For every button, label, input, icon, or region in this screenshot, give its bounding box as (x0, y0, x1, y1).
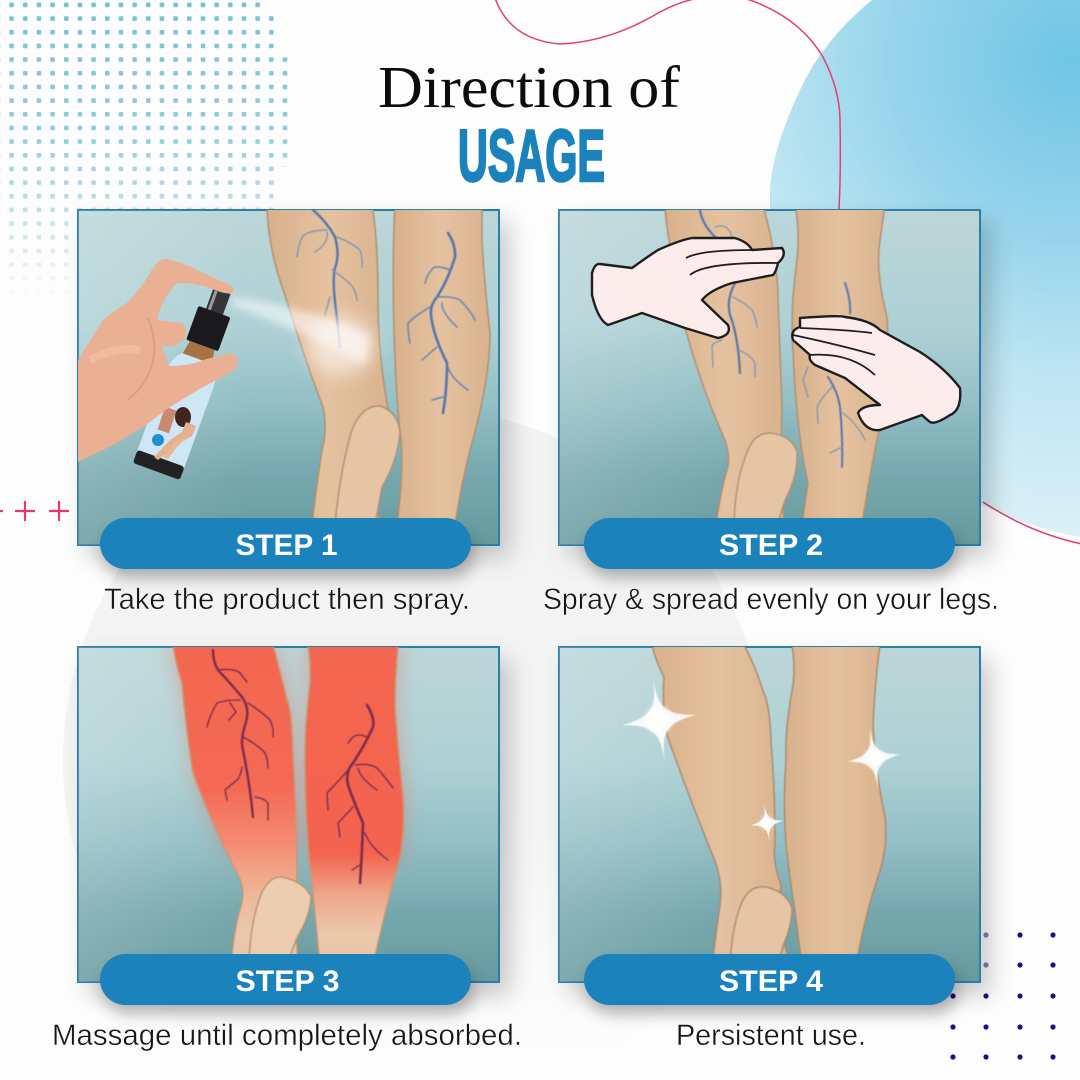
title line: direction of: Direction of (378, 54, 680, 120)
illustration: legs (592, 205, 960, 525)
step 1 pill (100, 518, 474, 578)
spray mist (232, 297, 374, 375)
icon: large sparkle (622, 682, 696, 759)
pink curved line right (983, 502, 1080, 544)
icon: medium sparkle (848, 729, 900, 788)
hand holding bottle (70, 259, 238, 470)
icon: small sparkle (750, 804, 784, 842)
step 2 pill (584, 518, 958, 578)
caption: step 2: Spray & spread evenly on your legs. (543, 583, 999, 616)
caption: step 1: Take the product then spray. (104, 583, 470, 616)
icon: upper hand (592, 238, 784, 338)
dark blue dot grid (950, 932, 1056, 1060)
panel: step 2 (559, 205, 991, 558)
pink curved line top (495, 0, 840, 209)
decorative soft grey circle (63, 408, 767, 1080)
blue background blob (770, 0, 1080, 537)
step 3 pill (100, 954, 474, 1014)
step 2 pill: STEP 2 (719, 529, 823, 562)
illustration: heated legs (170, 645, 405, 965)
step 4 pill: STEP 4 (719, 965, 823, 998)
dotted halftone pattern (0, 0, 290, 300)
panel: step 4 (559, 645, 991, 995)
step 3 pill: STEP 3 (236, 965, 340, 998)
icon: lower hand (792, 316, 960, 430)
bottle label artwork (152, 407, 196, 460)
illustration: smooth legs (616, 645, 905, 965)
panel: step 1 (70, 205, 510, 558)
panel: step 3 (78, 645, 510, 995)
step 1 pill: STEP 1 (236, 529, 338, 562)
title line: usage: USAGE (458, 116, 605, 197)
caption: step 3: Massage until completely absorbed. (52, 1019, 522, 1052)
title (378, 54, 680, 197)
product bottle (134, 289, 230, 480)
pink plus signs (0, 501, 69, 521)
caption: step 4: Persistent use. (676, 1019, 866, 1052)
illustration: legs with veins (70, 205, 490, 525)
step 4 pill (584, 954, 958, 1014)
